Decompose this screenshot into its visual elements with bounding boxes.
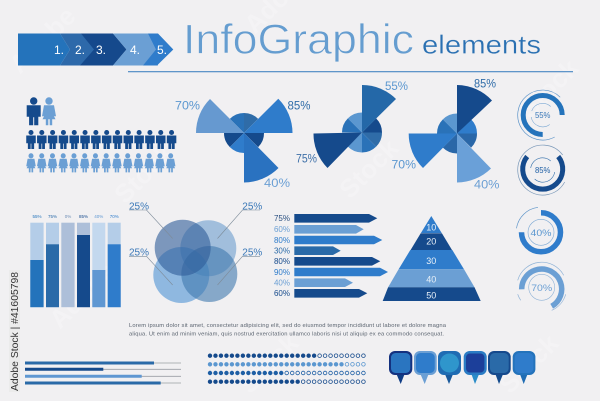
watermark: Stock bbox=[493, 328, 565, 399]
step arrow banner: 3. bbox=[96, 43, 106, 57]
step arrow banner: 4. bbox=[130, 43, 140, 57]
watermark: Stock bbox=[108, 138, 180, 209]
title: InfoGraphic: InfoGraphic bbox=[183, 16, 414, 62]
venn callouts: 25% bbox=[242, 248, 262, 259]
pyramid chart: 50 bbox=[426, 290, 436, 300]
pie chart 2 labels: 75% bbox=[296, 152, 317, 166]
arrow bar chart: 30% bbox=[274, 247, 290, 256]
arrow bar chart bbox=[274, 214, 388, 298]
people row: dark bbox=[26, 130, 176, 149]
ring gauge 40% bbox=[516, 207, 560, 252]
pyramid chart: 10 bbox=[426, 222, 436, 232]
venn callouts: 25% bbox=[129, 201, 149, 212]
step arrow banner bbox=[18, 34, 173, 66]
pyramid chart: 30 bbox=[426, 256, 436, 266]
people row: light bbox=[26, 153, 175, 172]
stacked bar chart: 0% bbox=[65, 214, 71, 219]
stock credit label: Adobe Stock | #41605798 bbox=[9, 272, 21, 391]
arrow bar chart: 75% bbox=[274, 214, 290, 223]
ring gauge 85% bbox=[518, 145, 565, 195]
watermark: Stock bbox=[233, 328, 305, 399]
ring gauge 70%: 70% bbox=[531, 283, 553, 294]
pie chart 1 labels: 85% bbox=[288, 98, 311, 112]
pie chart 1 labels: 70% bbox=[175, 98, 200, 112]
title: elements: elements bbox=[422, 30, 541, 60]
pyramid chart: 20 bbox=[426, 236, 436, 246]
pie chart 2 labels bbox=[296, 79, 408, 166]
ring gauge 85%: 85% bbox=[535, 166, 550, 175]
pie chart 3 labels: 70% bbox=[392, 157, 416, 171]
map pin icons bbox=[389, 351, 535, 384]
people icons: man and woman bbox=[27, 97, 56, 125]
arrow bar chart: 60% bbox=[274, 225, 290, 234]
venn callouts bbox=[129, 201, 262, 285]
pie chart 1 labels bbox=[175, 98, 311, 190]
pie chart 3 labels: 40% bbox=[474, 178, 500, 192]
step arrow banner: 5. bbox=[157, 43, 167, 57]
pie chart 3 bbox=[409, 85, 492, 182]
venn callouts: 25% bbox=[129, 248, 149, 259]
progress lines bbox=[25, 363, 181, 383]
pie chart 3 labels bbox=[392, 76, 500, 192]
stacked bar chart bbox=[30, 214, 121, 307]
arrow bar chart: 90% bbox=[274, 268, 290, 277]
pie chart 2 bbox=[313, 85, 396, 168]
title bbox=[183, 16, 541, 62]
arrow bar chart: 60% bbox=[274, 289, 290, 298]
ring gauge 55%: 55% bbox=[535, 111, 550, 120]
lorem ipsum text block: Lorem ipsum dolor sit amet, consectetur adipisicing elit, sed do eiusmod tempor incididunt ut labore et dolore magna bbox=[129, 323, 447, 329]
pyramid chart bbox=[383, 216, 481, 301]
dot matrix chart bbox=[210, 356, 364, 382]
arrow bar chart: 80% bbox=[274, 236, 290, 245]
step arrow banner: 2. bbox=[75, 43, 85, 57]
stacked bar chart: 85% bbox=[79, 214, 88, 219]
lorem ipsum text block: aliqua. Ut enim ad minim veniam, quis nostrud exercitation ullamco laboris nisi ut aliquip ex ea commodo consequat. bbox=[129, 331, 444, 337]
pie chart 3 labels: 85% bbox=[474, 76, 496, 90]
arrow bar chart: 40% bbox=[274, 279, 290, 288]
watermark: Stock bbox=[333, 133, 405, 204]
ring gauge 55% bbox=[518, 90, 562, 140]
step arrow banner: 1. bbox=[54, 43, 64, 57]
watermark: Adobe bbox=[43, 256, 121, 334]
ring gauge 70% bbox=[518, 262, 566, 310]
stacked bar chart: 40% bbox=[94, 214, 103, 219]
stacked bar chart: 70% bbox=[110, 214, 119, 219]
pyramid chart: 40 bbox=[426, 274, 436, 284]
pie chart 1 bbox=[196, 99, 292, 182]
venn diagram bbox=[153, 220, 237, 303]
stacked bar chart: 75% bbox=[48, 214, 57, 219]
title underline bbox=[128, 71, 573, 72]
pie chart 1 labels: 40% bbox=[264, 176, 290, 190]
arrow bar chart: 80% bbox=[274, 257, 290, 266]
watermark: Stock bbox=[513, 53, 585, 124]
pie chart 2 labels: 55% bbox=[385, 79, 408, 93]
ring gauge 40%: 40% bbox=[530, 228, 552, 239]
venn callouts: 25% bbox=[242, 201, 262, 212]
watermark: Adobe bbox=[3, 1, 81, 79]
lorem ipsum text block bbox=[129, 323, 447, 337]
stacked bar chart: 55% bbox=[32, 214, 42, 219]
